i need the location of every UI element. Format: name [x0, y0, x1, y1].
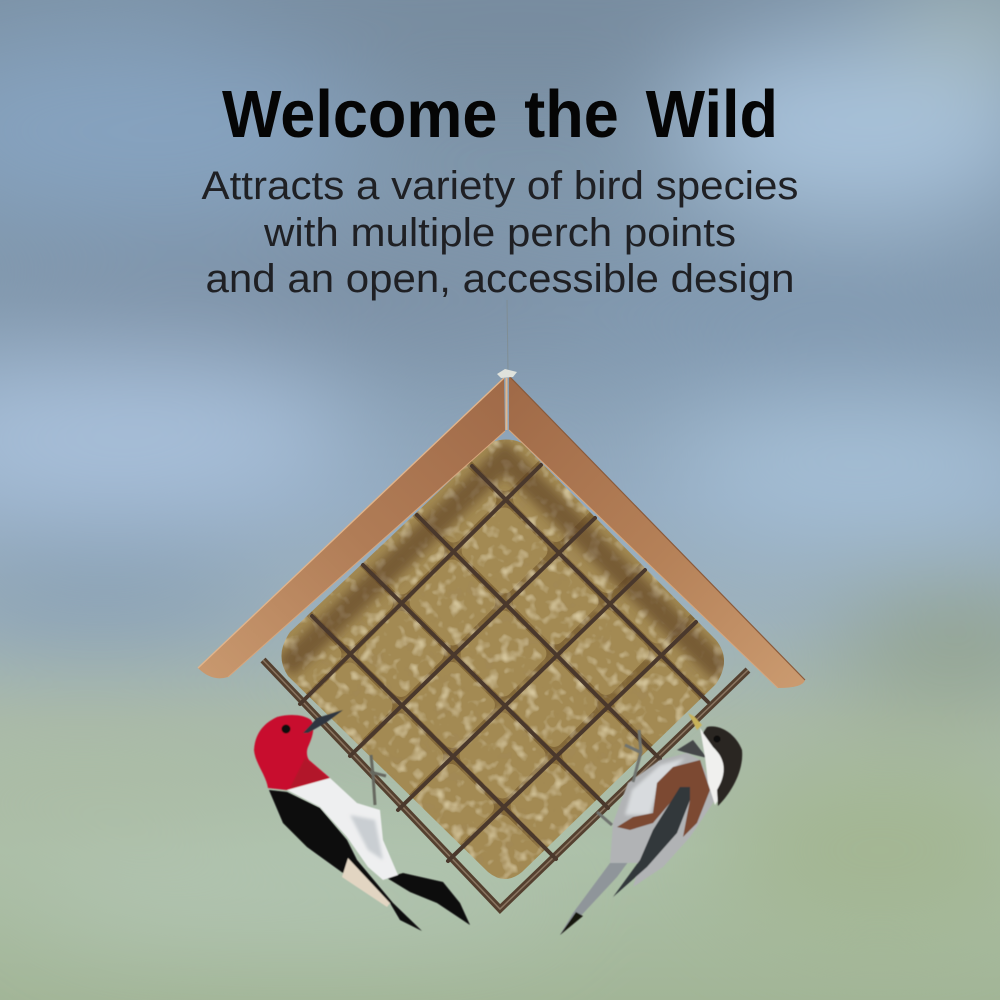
title: Welcome the Wild — [222, 77, 778, 152]
white cheek — [700, 728, 730, 805]
white body — [287, 778, 398, 880]
right roof panel — [509, 376, 805, 688]
wire cage outer frame — [263, 660, 748, 909]
bird: chestnut-backed chickadee — [560, 713, 742, 935]
cream wing patch — [342, 858, 390, 907]
tail — [560, 850, 637, 935]
subtitle text block: with multiple perch points — [263, 211, 736, 255]
subtitle text block — [202, 164, 798, 301]
eye — [714, 736, 720, 742]
dark wing — [613, 787, 690, 897]
beak — [303, 710, 343, 733]
beak — [688, 713, 702, 730]
foot — [370, 755, 386, 805]
suet feeder — [198, 369, 805, 909]
subtitle text block: and an open, accessible design — [206, 257, 794, 301]
hanging wire — [507, 300, 508, 372]
tail — [387, 873, 470, 925]
chestnut sides — [617, 760, 710, 837]
foot — [597, 730, 641, 825]
subtitle text block: Attracts a variety of bird species — [202, 164, 798, 208]
tray shadow under roof — [285, 458, 722, 672]
grey body — [610, 753, 717, 887]
red head and nape — [254, 715, 330, 790]
bird: red-headed woodpecker — [254, 710, 470, 931]
black wing — [269, 790, 422, 931]
left roof panel — [198, 378, 505, 678]
eye — [282, 724, 290, 734]
hanger clip — [497, 369, 517, 378]
dark cap — [703, 726, 742, 806]
wire grid — [300, 465, 708, 861]
copper roof — [198, 369, 805, 688]
suet cake — [282, 440, 724, 879]
throat — [677, 740, 707, 758]
